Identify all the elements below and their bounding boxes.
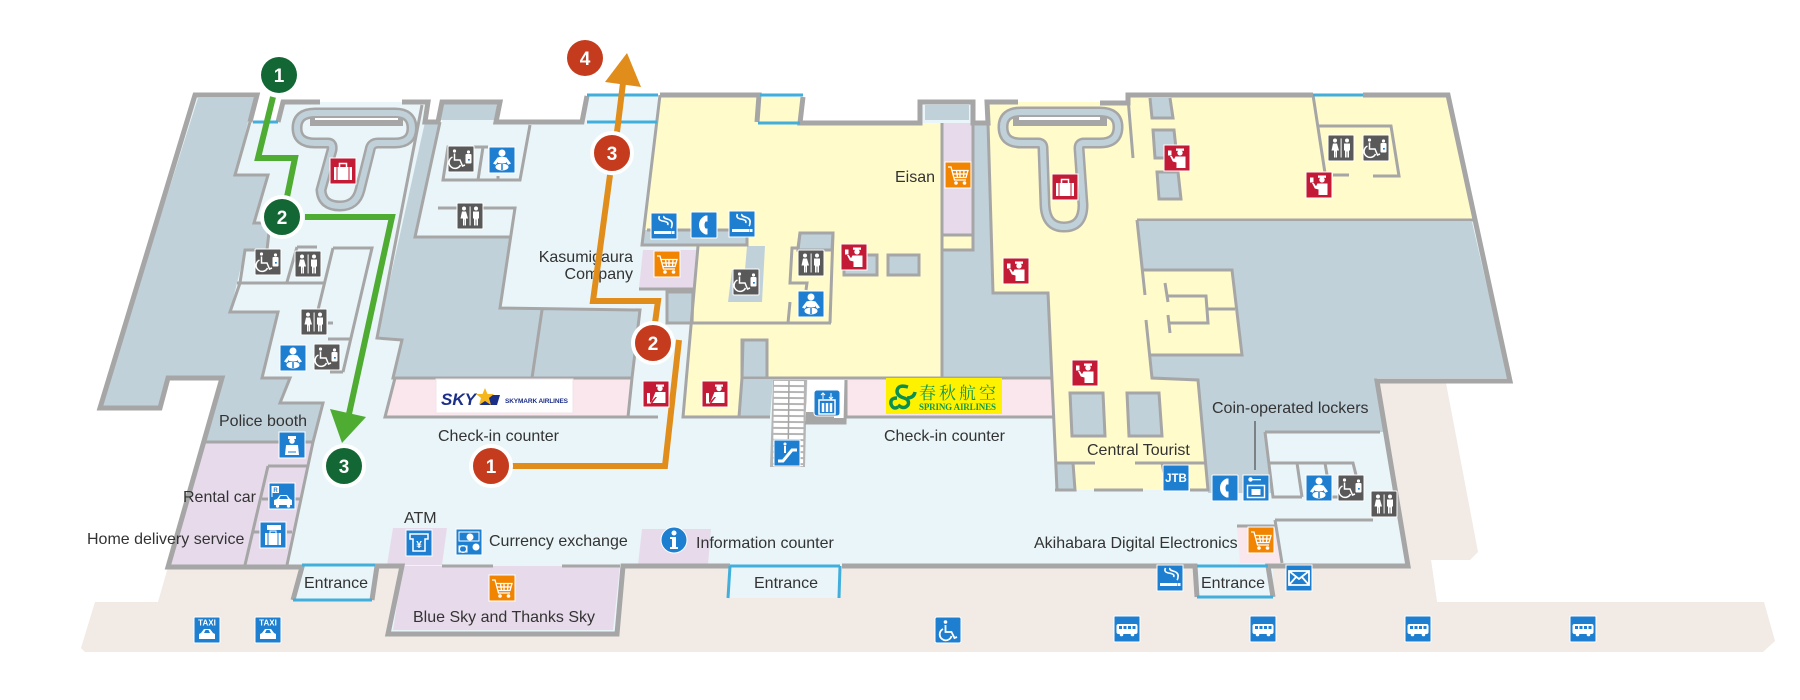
marker: red 3 bbox=[592, 133, 632, 173]
baggage carousel right bbox=[1003, 112, 1118, 227]
logo: Spring Airlines: SPRING AIRLINES bbox=[919, 402, 996, 412]
icon: accessible restroom bbox=[1338, 475, 1364, 501]
icon: phone bbox=[1212, 475, 1238, 501]
icon: smoking bbox=[1157, 565, 1183, 591]
baggage carousel left bbox=[297, 113, 412, 206]
marker: red 3: 3 bbox=[607, 144, 617, 165]
stairs bbox=[770, 380, 807, 467]
icon: taxi: TAXI bbox=[259, 618, 277, 628]
marker: red 2: 2 bbox=[648, 334, 658, 355]
label: Entrance east: Entrance bbox=[1201, 575, 1265, 592]
icon: security guard bbox=[1003, 258, 1029, 284]
icon: baby room bbox=[280, 345, 306, 371]
icon: elevator bbox=[814, 390, 840, 416]
label: Kasumigaura Company: Kasumigaura bbox=[539, 249, 633, 266]
icon: baby room bbox=[798, 291, 824, 317]
icon: bus stop bbox=[1114, 616, 1140, 642]
icon: luggage bbox=[1052, 174, 1078, 200]
label: ATM: ATM bbox=[404, 510, 437, 527]
icon: taxi: TAXI bbox=[198, 618, 216, 628]
icon: rental car: R bbox=[273, 488, 278, 494]
inner walls bbox=[203, 95, 1473, 566]
marker: green 3: 3 bbox=[339, 457, 349, 478]
label: Coin-operated lockers: Coin-operated lockers bbox=[1212, 400, 1369, 417]
icon: police booth bbox=[279, 432, 305, 458]
label: Check-in counter west: Check-in counter bbox=[438, 428, 560, 445]
green route segment 1 to 2 bbox=[258, 97, 295, 197]
icon: restroom bbox=[301, 309, 327, 335]
sidewalk bbox=[81, 383, 1775, 652]
icon: coin lockers bbox=[1243, 475, 1269, 501]
marker: green 1 bbox=[261, 57, 297, 93]
label: Rental car: Rental car bbox=[183, 489, 257, 506]
label: Akihabara Digital Electronics: Akihabara Digital Electronics bbox=[1034, 535, 1238, 552]
label: Currency exchange: Currency exchange bbox=[489, 533, 628, 550]
icon: shop cart bbox=[654, 251, 680, 277]
floor: terminal base bbox=[100, 95, 1510, 634]
icon: baby room bbox=[489, 147, 515, 173]
marker: green 1: 1 bbox=[274, 66, 285, 87]
icon: restroom bbox=[295, 251, 321, 277]
pink check-in areas bbox=[385, 379, 1280, 563]
label: Check-in counter east: Check-in counter bbox=[884, 428, 1006, 445]
icon: security guard bbox=[1164, 145, 1190, 171]
logo: Spring Airlines: 春秋航空 bbox=[919, 379, 996, 404]
icon: currency exchange bbox=[456, 529, 482, 555]
floor: yellow restricted area right bbox=[987, 95, 1473, 490]
gray-blue boxes bbox=[742, 130, 1181, 436]
label: Blue Sky and Thanks Sky: Blue Sky and Thanks Sky bbox=[413, 609, 595, 626]
marker: green 2: 2 bbox=[277, 208, 287, 229]
logo: Spring Airlines bbox=[886, 378, 1002, 414]
route: orange bbox=[512, 53, 679, 466]
icon: shop cart bbox=[945, 162, 971, 188]
icon: accessible restroom bbox=[1363, 135, 1389, 161]
non-public zones bbox=[100, 98, 1508, 493]
icon: JTB bbox=[1163, 465, 1189, 491]
icon: information bbox=[661, 527, 687, 553]
icon: accessible restroom bbox=[733, 269, 759, 295]
icon: wheelchair access bbox=[935, 617, 961, 643]
icon: ATM bbox=[406, 530, 432, 556]
icon: shop cart bbox=[1248, 527, 1274, 553]
icon: accessible restroom bbox=[255, 249, 281, 275]
marker: red 2 bbox=[633, 323, 673, 363]
outer walls bbox=[100, 95, 1510, 634]
label: Police booth: Police booth bbox=[219, 413, 307, 430]
icon: restroom bbox=[1328, 135, 1354, 161]
icon: rental car bbox=[269, 483, 295, 509]
icon: bus stop bbox=[1570, 616, 1596, 642]
label: Entrance center: Entrance bbox=[754, 575, 818, 592]
icon: taxi bbox=[194, 617, 220, 643]
icon: restroom bbox=[1371, 491, 1397, 517]
icon: accessible restroom bbox=[448, 146, 474, 172]
marker: red 4 bbox=[567, 40, 603, 76]
icon: bus stop bbox=[1405, 616, 1431, 642]
leader line: lockers bbox=[1254, 421, 1256, 470]
icon: JTB: JTB bbox=[1165, 473, 1187, 485]
marker: red 4: 4 bbox=[580, 49, 591, 70]
floor: yellow restricted area left bbox=[642, 95, 973, 415]
doors bbox=[253, 95, 1363, 600]
marker: red 1: 1 bbox=[486, 457, 497, 478]
label: Entrance west: Entrance bbox=[304, 575, 368, 592]
logo: Skymark Airlines: SKY bbox=[441, 390, 478, 409]
elevator hall bbox=[805, 380, 846, 424]
icon: restroom bbox=[798, 250, 824, 276]
label: Home delivery service: Home delivery service bbox=[87, 531, 244, 548]
icon: baby room bbox=[1306, 475, 1332, 501]
logo: Skymark Airlines: SKYMARK AIRLINES bbox=[505, 398, 569, 405]
label: Central Tourist: Central Tourist bbox=[1087, 442, 1190, 459]
icon: accessible restroom bbox=[314, 344, 340, 370]
icon: ATM: ¥ bbox=[416, 540, 422, 551]
icon: security guard bbox=[1306, 172, 1332, 198]
lilac shop areas bbox=[168, 123, 973, 630]
icon: phone bbox=[691, 212, 717, 238]
icon: bus stop bbox=[1250, 616, 1276, 642]
marker: green 3 bbox=[324, 446, 364, 486]
icon: smoking bbox=[729, 211, 755, 237]
logo: Skymark Airlines bbox=[436, 379, 573, 413]
marker: green 2 bbox=[262, 197, 302, 237]
icon: restroom bbox=[457, 203, 483, 229]
marker: red 1 bbox=[471, 446, 511, 486]
orange route segment 1 to 2 bbox=[512, 340, 679, 466]
icon: taxi bbox=[255, 617, 281, 643]
label: Information counter: Information counter bbox=[696, 535, 835, 552]
icon: check-in staff bbox=[643, 381, 669, 407]
icon: shop cart bbox=[489, 575, 515, 601]
icon: security guard bbox=[841, 244, 867, 270]
icon: luggage bbox=[330, 158, 356, 184]
icon: home delivery bbox=[260, 522, 286, 548]
icon: security guard bbox=[1072, 360, 1098, 386]
icon: smoking bbox=[651, 213, 677, 239]
icon: post box bbox=[1286, 565, 1312, 591]
label: Eisan: Eisan bbox=[895, 169, 935, 186]
icon: escalator bbox=[774, 440, 800, 466]
icon: check-in staff bbox=[702, 381, 728, 407]
route: green bbox=[258, 97, 392, 443]
label: Kasumigaura Company: Company bbox=[565, 266, 633, 283]
